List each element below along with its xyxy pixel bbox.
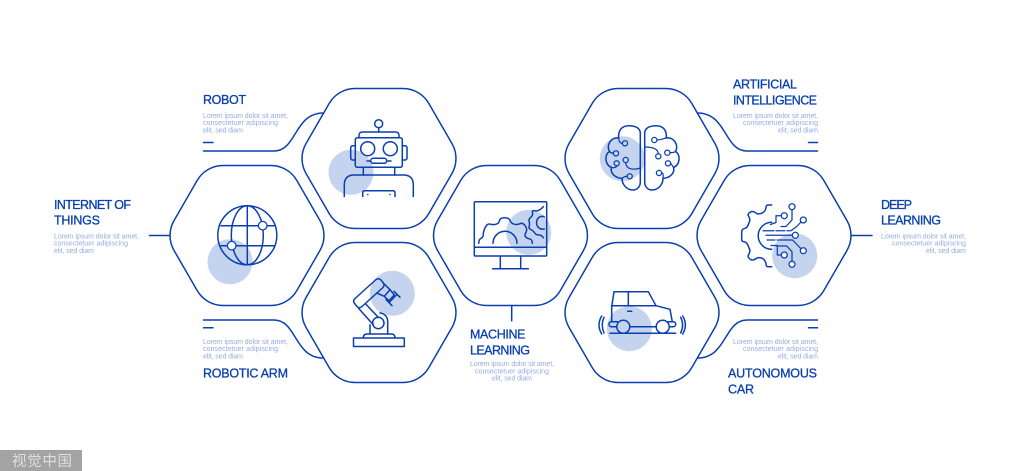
description: machine learning: consectetuer adipiscing [475, 368, 549, 375]
hexagon: machine learning [434, 166, 587, 306]
connector: robot [204, 113, 324, 151]
heading: autonomous car: CAR [728, 382, 754, 396]
hexagon: artificial intelligence [565, 88, 719, 228]
connector: artificial intelligence [698, 113, 818, 151]
heading: internet of things: THINGS [54, 213, 100, 227]
dash: robotic arm [204, 327, 213, 329]
icon: robotic arm [354, 271, 415, 346]
panel: robot [203, 88, 456, 228]
connector: autonomous car [698, 320, 818, 358]
heading: robot: ROBOT [203, 93, 246, 107]
heading: deep learning: DEEP [881, 198, 912, 212]
connector: internet of things [150, 234, 169, 236]
description: deep learning: consectetuer adipiscing [892, 241, 966, 248]
description: internet of things [54, 234, 139, 255]
panel: autonomous car [565, 242, 818, 396]
hexagon: robot [302, 88, 456, 228]
description: autonomous car: elit, sed diam [778, 353, 818, 360]
watermark [0, 450, 82, 471]
hexagon: robotic arm [302, 242, 456, 382]
heading: deep learning [881, 198, 941, 228]
heading: artificial intelligence: ARTIFICIAL [733, 77, 797, 91]
heading: autonomous car [728, 367, 817, 396]
description: robotic arm: consectetuer adipiscing [203, 346, 278, 353]
description: robot [203, 113, 288, 134]
description: robot: elit, sed diam [203, 127, 243, 134]
icon: robot [328, 120, 413, 196]
description: robot: Lorem ipsum dolor sit amet, [203, 113, 288, 120]
heading: machine learning: LEARNING [470, 343, 530, 357]
heading: machine learning [470, 327, 530, 357]
description: machine learning [470, 361, 554, 382]
connector: deep learning [852, 234, 872, 236]
panel: deep learning [697, 166, 966, 306]
description: robot: consectetuer adipiscing [203, 120, 278, 127]
panel: internet of things [54, 166, 324, 306]
heading: artificial intelligence [733, 77, 817, 107]
description: internet of things: consectetuer adipiscing [54, 241, 128, 248]
description: artificial intelligence [733, 113, 818, 134]
panel: robotic arm [203, 242, 456, 382]
heading: autonomous car: AUTONOMOUS [728, 367, 817, 381]
connector: robotic arm [204, 320, 324, 358]
icon: monitor with gears [474, 202, 551, 269]
dash: robot [204, 142, 213, 144]
description: deep learning: Lorem ipsum dolor sit amet, [881, 234, 966, 240]
icon: car [599, 292, 685, 351]
description: autonomous car: consectetuer adipiscing [743, 346, 818, 353]
watermark: 视觉中国 [12, 453, 72, 470]
dash: autonomous car [808, 327, 818, 329]
connector: machine learning [511, 306, 513, 321]
description: robotic arm [203, 339, 288, 360]
heading: internet of things: INTERNET OF [54, 198, 131, 212]
description: internet of things: Lorem ipsum dolor sit amet, [54, 234, 139, 240]
heading: deep learning: LEARNING [881, 214, 941, 228]
hexagon: deep learning [697, 166, 851, 306]
hexagon: autonomous car [565, 242, 719, 382]
heading: artificial intelligence: INTELLIGENCE [733, 93, 817, 107]
description: autonomous car: Lorem ipsum dolor sit amet, [733, 339, 818, 346]
icon: brain [600, 126, 679, 190]
icon: globe [208, 206, 277, 284]
heading: machine learning: MACHINE [470, 327, 526, 341]
panel: machine learning [434, 166, 587, 382]
description: robotic arm: Lorem ipsum dolor sit amet, [203, 339, 288, 346]
panel: artificial intelligence [565, 77, 818, 228]
description: deep learning: elit, sed diam [926, 248, 966, 255]
description: machine learning: Lorem ipsum dolor sit amet, [470, 361, 554, 368]
hexagon: internet of things [170, 166, 324, 306]
description: deep learning [881, 234, 966, 255]
description: artificial intelligence: elit, sed diam [778, 127, 818, 134]
icon: gear with circuits [742, 204, 817, 278]
description: artificial intelligence: consectetuer adipiscing [743, 120, 818, 127]
heading: internet of things [54, 198, 131, 227]
description: artificial intelligence: Lorem ipsum dolor sit amet, [733, 113, 818, 120]
description: internet of things: elit, sed diam [54, 248, 94, 255]
description: robotic arm: elit, sed diam [203, 353, 243, 360]
dash: artificial intelligence [808, 142, 818, 144]
description: autonomous car [733, 339, 818, 360]
heading: robotic arm: ROBOTIC ARM [203, 367, 288, 381]
description: machine learning: elit, sed diam [492, 376, 532, 382]
